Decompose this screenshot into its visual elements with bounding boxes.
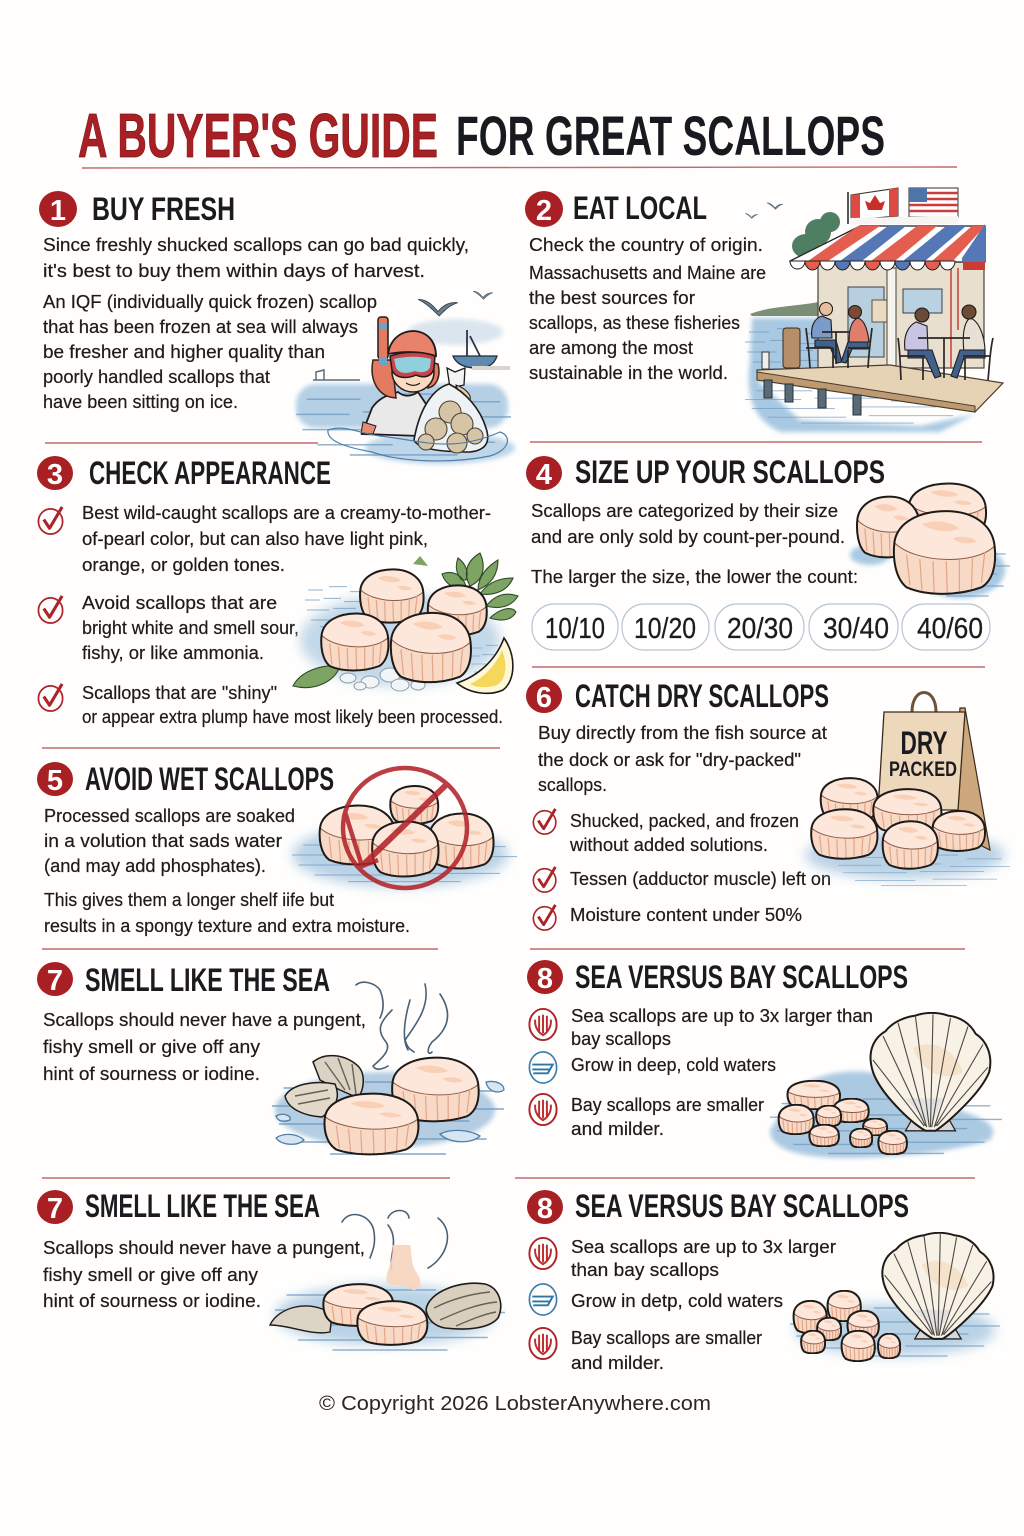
text block: buy directly: Buy directly from the fish source at <box>538 722 827 743</box>
item: bay scallops: Bay scallops are smaller <box>571 1094 764 1115</box>
text block: IQF <box>43 291 377 412</box>
text block: processed: (and may add phosphates). <box>44 855 266 876</box>
item: sea scallop size: Sea scallops are up to 3x larger <box>571 1236 836 1257</box>
number badge 4 <box>526 456 562 491</box>
number badge 6: 6 <box>536 682 552 714</box>
item: bay scallops: and milder. <box>571 1352 664 1373</box>
illustration: scallops on ice with lemon <box>293 553 518 693</box>
size count pills <box>532 604 990 650</box>
pill 40/60 <box>902 604 990 650</box>
illustration: three scallops <box>850 483 1010 598</box>
text block: processed <box>44 805 295 876</box>
panel: smell like the sea (second) <box>37 1188 505 1350</box>
text block: country of origin: the best sources for <box>529 287 695 308</box>
item: bay scallops: Bay scallops are smaller <box>571 1327 762 1348</box>
pill 40/60: 40/60 <box>917 613 983 645</box>
copyright footer: © Copyright 2026 LobsterAnywhere.com <box>319 1393 711 1415</box>
number badge 1: 1 <box>50 195 66 227</box>
diners <box>812 302 985 378</box>
number badge 3: 3 <box>47 459 63 491</box>
panel: avoid wet scallops <box>37 761 517 936</box>
checklist item: shucked: Shucked, packed, and frozen <box>570 810 799 831</box>
text block: country of origin: Massachusetts and Maine are <box>529 262 766 283</box>
item: sea scallop size: Sea scallops are up to 3x larger than <box>571 1005 873 1026</box>
text block: IQF: be fresher and higher quality than <box>43 341 325 362</box>
number badge 6 <box>526 679 562 714</box>
number badge 4: 4 <box>536 459 552 491</box>
heading: eat local: EAT LOCAL <box>573 190 707 226</box>
item: deep water: Grow in deep, cold waters <box>571 1054 776 1075</box>
text block: intro: it's best to buy them within days of harvest. <box>43 260 425 281</box>
number badge 5: 5 <box>47 765 63 797</box>
number badge 5 <box>37 762 73 797</box>
striped awning <box>790 224 985 270</box>
item: sea scallop size <box>529 1005 873 1049</box>
number badge 2: 2 <box>536 195 552 227</box>
text block: buy directly <box>538 722 827 795</box>
number badge 7: 7 <box>47 1193 63 1225</box>
checklist item: moisture: Moisture content under 50% <box>570 904 802 925</box>
heading: sea versus bay scallops: SEA VERSUS BAY SCALLOPS <box>575 1188 909 1224</box>
heading: catch dry scallops: CATCH DRY SCALLOPS <box>575 678 829 714</box>
illustration: nose above scallops and shells <box>270 1210 505 1350</box>
checklist item: shiny: Scallops that are "shiny" <box>82 682 277 703</box>
checklist item: moisture <box>533 904 802 930</box>
item: deep water <box>529 1284 783 1315</box>
text block: shelf life <box>44 889 410 936</box>
illustration: wet scallops with prohibition sign <box>292 768 517 888</box>
text block: buy directly: the dock or ask for "dry-packed" <box>538 749 801 770</box>
checklist item: avoid: fishy, or like ammonia. <box>82 642 264 663</box>
panel: eat local <box>525 188 1003 432</box>
text block: smell: fishy smell or give off any <box>43 1264 259 1285</box>
text block: IQF: An IQF (individually quick frozen) scallop <box>43 291 377 312</box>
text block: country of origin: sustainable in the world. <box>529 362 728 383</box>
panel: smell like the sea (first) <box>37 962 504 1154</box>
panel: buy fresh <box>39 191 515 464</box>
text block: smell <box>43 1237 365 1311</box>
dock <box>757 365 1003 412</box>
illustration: large shell and small scallops <box>790 1233 1000 1361</box>
text block: IQF: have been sitting on ice. <box>43 391 238 412</box>
item: deep water: Grow in detp, cold waters <box>571 1290 783 1311</box>
pill 20/30: 20/30 <box>727 613 793 645</box>
number badge 8: 8 <box>537 1193 553 1225</box>
heading: avoid wet scallops: AVOID WET SCALLOPS <box>85 761 334 797</box>
pill 10/10: 10/10 <box>545 613 605 645</box>
checklist item: tessen: Tessen (adductor muscle) left on <box>570 868 831 889</box>
item: sea scallop size: than bay scallops <box>571 1259 719 1280</box>
pill 10/10 <box>532 604 618 650</box>
number badge 1 <box>39 191 77 227</box>
text block: size explanation: and are only sold by count-per-pound. <box>531 526 845 547</box>
checklist item: shucked <box>533 809 799 855</box>
checklist item: colour <box>38 502 491 575</box>
item: sea scallop size <box>529 1236 836 1280</box>
item: bay scallops: and milder. <box>571 1118 664 1139</box>
paper bag <box>878 692 990 850</box>
number badge 8 <box>527 960 563 995</box>
checklist item: avoid <box>38 592 299 663</box>
prohibition sign <box>343 768 467 888</box>
number badge 7 <box>37 962 73 997</box>
text block: smell: fishy smell or give off any <box>43 1036 261 1057</box>
nose <box>386 1245 420 1290</box>
text block: smell: Scallops should never have a pungent, <box>43 1237 365 1258</box>
flags <box>848 188 958 224</box>
text block: shelf life: results in a spongy texture and extra moisture. <box>44 915 410 936</box>
text block: country of origin: Check the country of origin. <box>529 234 763 255</box>
text block: intro: Since freshly shucked scallops can go bad quickly, <box>43 234 469 255</box>
number badge 7: 7 <box>47 965 63 997</box>
pill 20/30 <box>715 604 804 650</box>
title <box>78 102 885 171</box>
number badge 2 <box>525 191 563 227</box>
item: bay scallops <box>529 1094 764 1139</box>
paper bag: PACKED <box>889 758 957 781</box>
pill 10/20: 10/20 <box>634 613 696 645</box>
checklist item: colour: of-pearl color, but can also have light pink, <box>82 528 428 549</box>
text block: smell: Scallops should never have a pungent, <box>43 1009 366 1030</box>
text block: IQF: that has been frozen at sea will always <box>43 316 358 337</box>
text block: buy directly: scallops. <box>538 774 607 795</box>
panel: catch dry scallops <box>526 678 1010 930</box>
aroma waves <box>356 982 448 1069</box>
panel: size up your scallops <box>526 454 1010 650</box>
heading: check appearance: CHECK APPEARANCE <box>89 455 331 491</box>
item: deep water <box>529 1052 776 1083</box>
panel: check appearance <box>37 455 518 727</box>
checklist item: avoid: Avoid scallops that are <box>82 592 277 613</box>
text block: smell <box>43 1009 366 1084</box>
checklist item: colour: orange, or golden tones. <box>82 554 285 575</box>
checklist item: shiny: or appear extra plump have most likely been processed. <box>82 706 503 727</box>
text block: size explanation: The larger the size, the lower the count: <box>531 566 858 587</box>
tree <box>792 212 840 258</box>
text block: processed: Processed scallops are soaked <box>44 805 295 826</box>
number badge 8 <box>527 1190 563 1225</box>
illustration: large shell and small scallops <box>770 1013 1002 1158</box>
illustration: snorkeler with bag of scallops <box>296 291 515 464</box>
illustration: scallops with aroma waves <box>272 982 504 1154</box>
heading: smell like the sea: SMELL LIKE THE SEA <box>85 1188 320 1224</box>
pill 10/20 <box>622 604 709 650</box>
item: sea scallop size: bay scallops <box>571 1028 671 1049</box>
illustration: waterfront cafe with flags <box>745 188 1003 432</box>
number badge 7 <box>37 1190 73 1225</box>
pill 30/40 <box>809 604 898 650</box>
heading: sea versus bay scallops: SEA VERSUS BAY SCALLOPS <box>575 959 908 995</box>
heading: size up your scallops: SIZE UP YOUR SCALLOPS <box>575 454 885 490</box>
text block: size explanation: Scallops are categorized by their size <box>531 500 838 521</box>
illustration: dry packed bag and scallops <box>805 692 1010 885</box>
text block: size explanation <box>531 500 858 587</box>
checklist item: shucked: without added solutions. <box>569 834 768 855</box>
number badge 3 <box>37 456 73 491</box>
text block: intro <box>43 234 469 281</box>
item: bay scallops <box>529 1327 762 1373</box>
text block: country of origin: are among the most <box>529 337 693 358</box>
heading: buy fresh: BUY FRESH <box>92 191 235 227</box>
aroma waves <box>342 1210 447 1270</box>
text block: processed: in a volution that sads water <box>44 830 282 851</box>
text block: smell: hint of sourness or iodine. <box>43 1290 261 1311</box>
text block: shelf life: This gives them a longer shelf iife but <box>44 889 334 910</box>
text block: country of origin: scallops, as these fisheries <box>529 312 740 333</box>
checklist item: avoid: bright white and smell sour, <box>82 617 299 638</box>
building <box>818 262 984 368</box>
pill 30/40: 30/40 <box>823 613 889 645</box>
text block: smell: hint of sourness or iodine. <box>43 1063 260 1084</box>
checklist item: shiny <box>38 682 503 727</box>
panel: sea versus bay scallops (first) <box>527 959 1002 1158</box>
number badge 8: 8 <box>537 963 553 995</box>
panel: sea versus bay scallops (second) <box>527 1188 1000 1373</box>
text block: IQF: poorly handled scallops that <box>43 366 270 387</box>
checklist item: colour: Best wild-caught scallops are a creamy-to-mother- <box>82 502 491 523</box>
title: A BUYER'S GUIDE <box>78 102 438 171</box>
paper bag: DRY <box>900 725 948 761</box>
shells <box>285 1056 363 1117</box>
heading: smell like the sea: SMELL LIKE THE SEA <box>85 962 330 998</box>
text block: country of origin <box>529 234 766 383</box>
